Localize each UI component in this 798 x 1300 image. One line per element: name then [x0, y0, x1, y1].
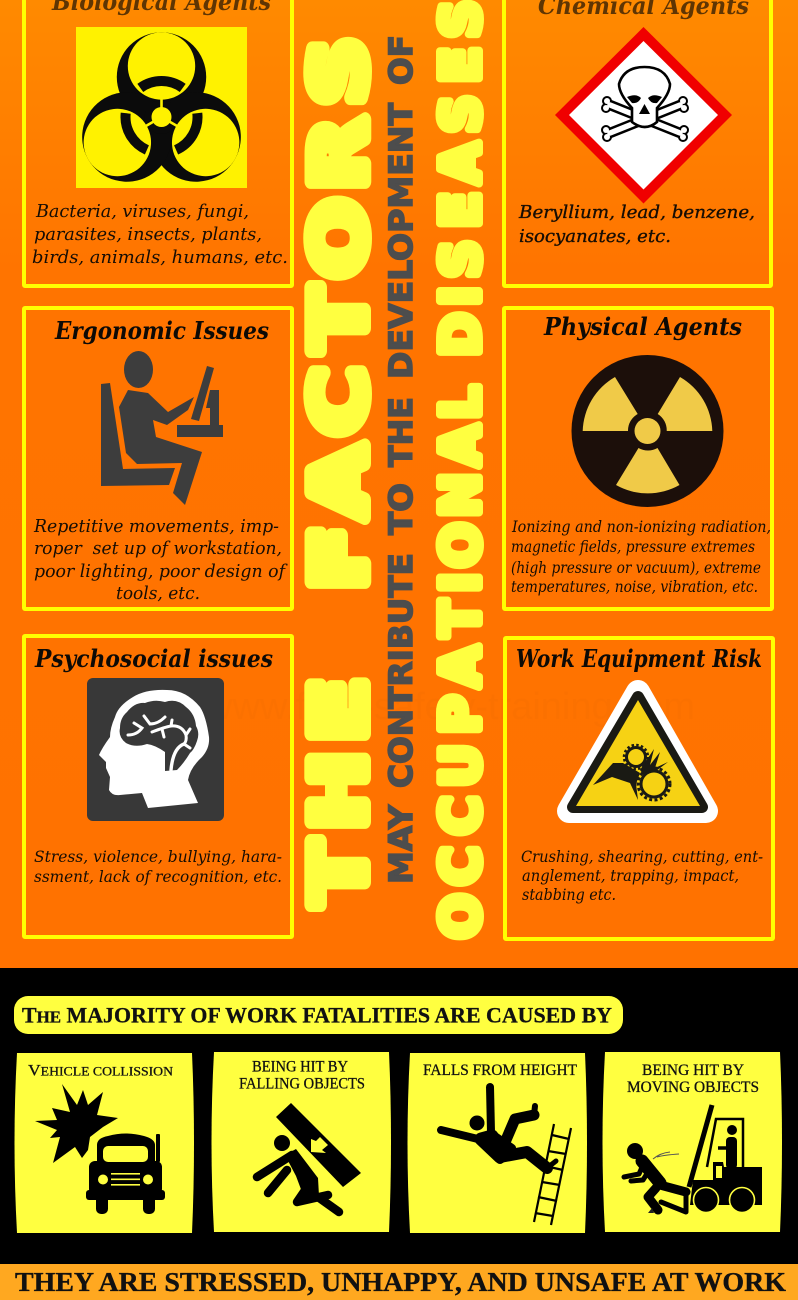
card: vehicle collision — [14, 1053, 194, 1233]
panel: work equipment risk — [505, 638, 773, 939]
text: ergonomic issues list: poor lighting, poor design of — [34, 561, 288, 582]
card: falls from height — [408, 1053, 587, 1233]
label: falls from height: FALLS FROM HEIGHT — [423, 1062, 577, 1079]
icon: skull hazard diamond — [555, 27, 732, 204]
text: biological agents list: birds, animals, humans, etc. — [32, 247, 288, 268]
text: biological agents list — [32, 201, 288, 268]
label: being hit by falling objects — [239, 1058, 365, 1092]
card: falling objects — [212, 1052, 391, 1232]
black fatalities section — [0, 968, 798, 1264]
orange background — [0, 0, 798, 968]
text: chemical agents list — [518, 202, 755, 247]
icon: falling person and ladder — [441, 1087, 571, 1225]
icon: head with brain — [87, 678, 224, 821]
text: chemical agents list: isocyanates, etc. — [519, 226, 671, 247]
subtitle: may contribute to the development of: MAY — [382, 804, 420, 884]
icon: entanglement warning triangle — [569, 692, 706, 811]
text: work equipment risk list — [521, 847, 763, 904]
label: vehicle collision: VEHICLE COLLISSION — [28, 1062, 173, 1080]
title: occupational diseases: OCCUPATIONAL DISEASES — [429, 0, 492, 939]
text: ergonomic issues list — [33, 516, 288, 604]
icon: worker struck by beam — [257, 1103, 361, 1212]
subtitle: may contribute to the development of: THE — [382, 397, 420, 467]
icon: forklift hitting worker — [624, 1105, 762, 1213]
watermark: www.free-safety-training.com — [204, 686, 695, 728]
label: being hit by moving objects — [627, 1062, 759, 1096]
icon: biohazard — [66, 27, 257, 198]
text: work equipment risk list: Crushing, shearing, cutting, ent- — [521, 847, 763, 866]
text: chemical agents list: Beryllium, lead, benzene, — [518, 202, 755, 223]
text: physical agents list — [511, 517, 771, 596]
label: being hit by falling objects: BEING HIT BY — [252, 1058, 348, 1076]
panel: chemical agents — [504, 0, 771, 286]
panel: psychosocial issues — [24, 636, 292, 937]
heading: psychosocial issues: Psychosocial issues — [34, 644, 273, 673]
panel: ergonomic issues — [24, 308, 292, 609]
banner: majority of work fatalities — [14, 996, 623, 1034]
text: psychosocial issues list: Stress, violence, bullying, hara- — [34, 847, 282, 866]
subtitle: may contribute to the development of: DEVELOPMENT — [382, 103, 420, 379]
card: moving objects — [602, 1052, 782, 1232]
heading: physical agents: Physical Agents — [543, 312, 742, 341]
subtitle: may contribute to the development of: TO — [382, 483, 420, 535]
text: physical agents list: Ionizing and non-ionizing radiation, — [511, 517, 771, 536]
text: ergonomic issues list: Repetitive movements, imp- — [33, 516, 279, 537]
text: biological agents list: Bacteria, viruses, fungi, — [35, 201, 249, 222]
panel: physical agents — [504, 308, 772, 609]
text: biological agents list: parasites, insects, plants, — [34, 224, 262, 245]
subtitle: may contribute to the development of: CONTRIBUTE — [382, 553, 420, 788]
text: psychosocial issues list: ssment, lack of recognition, etc. — [34, 867, 282, 886]
label: being hit by moving objects: MOVING OBJECTS — [627, 1079, 759, 1096]
icon: radiation trefoil — [572, 355, 724, 507]
label: being hit by moving objects: BEING HIT BY — [642, 1062, 744, 1079]
icon: explosion and truck — [35, 1084, 165, 1214]
bottom banner: THEY ARE STRESSED, UNHAPPY, AND UNSAFE AT WORK — [15, 1267, 786, 1297]
text: work equipment risk list: stabbing etc. — [522, 885, 616, 904]
title: the factors: THE FACTORS — [296, 37, 384, 905]
label: being hit by falling objects: FALLING OBJECTS — [239, 1076, 365, 1092]
text: ergonomic issues list: tools, etc. — [116, 583, 200, 604]
text: physical agents list: (high pressure or vacuum), extreme — [511, 558, 761, 577]
text: psychosocial issues list — [34, 847, 282, 886]
text: physical agents list: magnetic fields, pressure extremes — [511, 537, 755, 556]
panel: biological agents — [24, 0, 292, 286]
banner: majority of work fatalities: THE MAJORITY OF WORK FATALITIES ARE CAUSED BY — [22, 1002, 612, 1028]
heading: ergonomic issues: Ergonomic Issues — [54, 316, 269, 345]
text: work equipment risk list: anglement, trapping, impact, — [522, 866, 739, 885]
text: ergonomic issues list: roper set up of workstation, — [34, 538, 282, 559]
text: physical agents list: temperatures, noise, vibration, etc. — [511, 577, 758, 596]
subtitle: may contribute to the development of: OF — [382, 35, 420, 85]
icon: person at workstation — [101, 351, 223, 505]
subtitle: may contribute to the development of — [382, 35, 420, 884]
